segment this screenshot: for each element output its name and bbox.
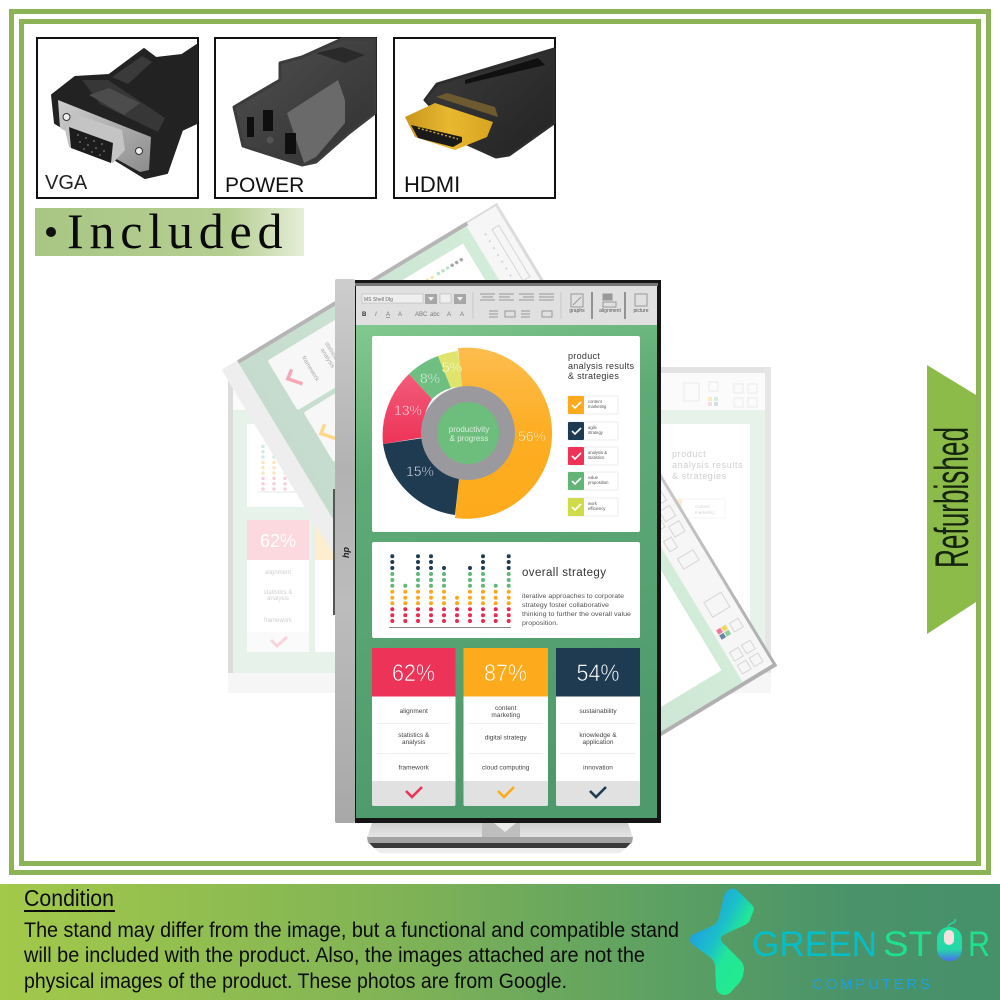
ghost donut card [383,424,750,652]
legend: efficiency [588,506,606,511]
legend: agile [588,425,598,430]
screen background [356,325,657,818]
toolbar: A [386,312,390,318]
condition body: The stand may differ from the image, but a functional and compatible stand [24,918,679,942]
toolbar: graphs [569,308,585,314]
ghost card 62%: framework [264,618,293,624]
donut chart: 15% [406,463,434,479]
background monitor: rotated [222,203,777,833]
legend [568,396,618,516]
rotated card 62%: statistics & [323,341,343,369]
chart title: & strategies [568,371,619,381]
ghost card 87% [315,520,377,652]
rotated card 62%: alignment [342,331,361,357]
strategy paragraph: iterative approaches to corporate [522,593,624,600]
icon: VGA connector [52,45,197,178]
wordmark COMPUTERS: COMPUTERS [812,976,930,993]
donut chart: 5% [442,359,462,375]
panel: power connector thumbnail [215,38,376,198]
monitor [333,279,661,823]
wordmark ST: ST [883,925,932,964]
logo: Greenstor Computers [690,888,990,995]
logo mark [690,888,754,995]
donut chart: & progress [450,434,488,443]
heading: Included: Included [67,203,288,259]
panel: VGA connector thumbnail [37,38,198,198]
donut chart [383,348,552,519]
ribbon: Refurbished [925,365,978,634]
card: 54%: sustainability [579,708,617,715]
card: 62%: 62% [392,660,435,687]
footer band [0,884,1000,1000]
legend: value [588,475,599,480]
card: 62%: framework [399,764,430,772]
card: 62%: statistics & [398,732,430,739]
ghost donut card: & strategies [672,471,727,481]
card: 54%: 54% [576,660,620,687]
strategy paragraph [522,593,631,627]
card: 87%: marketing [491,712,520,719]
monitor bezel [355,280,661,823]
panel: overall strategy [372,542,640,638]
legend: work [588,501,598,506]
card: 87% [464,648,548,806]
rotated card 62%: analysis [319,348,335,369]
condition body: will be included with the product. Also, the images attached are not the [23,943,645,967]
toolbar: alignment [599,308,621,314]
dot chart [389,556,511,628]
rotated toolbar icons [478,225,764,674]
legend: proposition [588,480,609,485]
toolbar: abc [430,312,440,318]
monitor stand [367,823,633,853]
wordmark GREEN: GREEN [752,925,877,964]
card: 54%: innovation [583,764,613,772]
card: 54% [556,648,640,806]
rotated donut card [334,353,722,788]
ghost chart card [247,424,377,507]
background monitor: faded landscape [228,367,771,693]
rotated donut card: product [495,691,517,719]
strategy paragraph: proposition. [522,620,558,627]
donut chart: 8% [420,370,440,386]
card: 62%: analysis [402,739,426,746]
card: 62% [372,648,456,806]
chart title [568,351,635,381]
ghost card 62%: 62% [260,531,296,551]
legend: content [588,399,603,404]
ghost card 62% [247,520,309,652]
toolbar: A [447,312,451,318]
ghost donut card: marketing [695,510,715,515]
condition heading: Condition [24,885,114,911]
panel: HDMI connector thumbnail [394,38,555,198]
icon: mouse [937,919,962,961]
ghost donut card: product [672,449,706,459]
strategy paragraph: thinking to further the overall value [522,611,631,618]
panel: donut card [372,336,640,532]
strategy paragraph: strategy foster collaborative [522,602,609,609]
legend: analysis & [588,450,607,455]
card: 62%: alignment [400,708,428,715]
donut chart: 13% [394,402,422,418]
toolbar [356,286,657,325]
ghost card 62%: statistics & [264,590,292,596]
wordmark R: R [968,925,990,964]
strategy heading: overall strategy [522,567,606,579]
legend: marketing [588,404,607,409]
donut chart: 56% [518,428,546,444]
ghost card 62%: alignment [265,570,291,576]
rotated card 62% [267,292,410,410]
label: POWER: POWER [225,174,304,197]
rotated chart card [388,243,526,393]
condition body: physical images of the product. These photos are from Google. [24,969,567,993]
toolbar: B [362,312,367,318]
toolbar: ABC [415,312,428,318]
rotated card 87% [304,346,443,462]
label: HDMI: HDMI [404,172,460,197]
chart title: analysis results [568,361,635,371]
legend: statistics [588,455,604,460]
toolbar: picture [633,308,649,314]
condition body [23,918,679,993]
toolbar: MS Shell Dlg [364,297,393,303]
card: 54%: knowledge & [579,732,617,739]
rotated donut card: results [521,704,540,729]
icon: hp logo: hp [341,547,351,558]
ghost donut card: content [695,504,711,509]
card: 87%: content [495,705,517,712]
card: 87%: 87% [484,660,527,687]
rotated card 62%: framework [300,355,320,383]
card: 54%: application [582,739,614,746]
card: 87%: cloud computing [482,764,530,772]
ghost toolbar icons [684,382,757,407]
toolbar: A [398,312,402,318]
chart title: product [568,351,600,361]
legend: strategy [588,430,604,435]
ribbon: Refurbished: Refurbished [925,427,978,568]
icon: HDMI connector [405,49,554,157]
ghost donut card: analysis results [672,460,743,470]
condition text [23,885,679,993]
ghost card 62%: analysis [267,596,289,602]
icon: power connector [234,39,375,165]
toolbar: I [375,312,377,318]
label: VGA: VGA [45,172,88,194]
card: 87%: digital strategy [485,734,527,742]
toolbar: A [460,312,464,318]
donut chart: productivity [449,425,489,434]
